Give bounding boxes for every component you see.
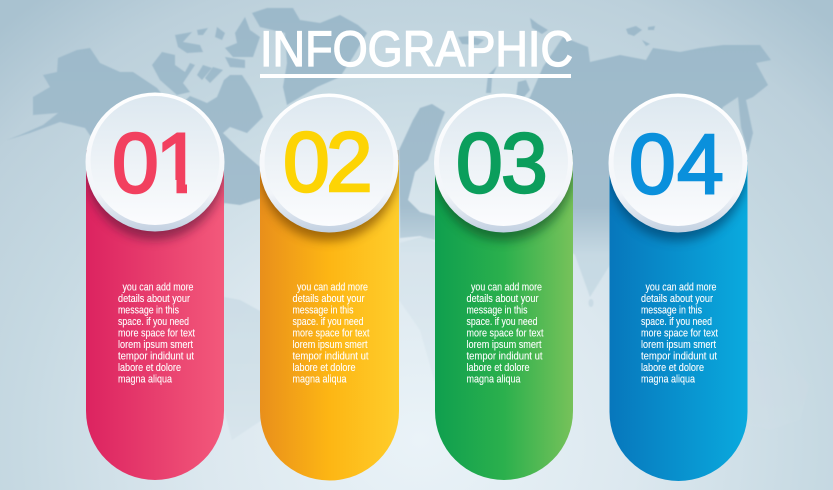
body text: [292, 282, 370, 386]
number: 2: [326, 115, 373, 209]
pill: [260, 160, 399, 480]
circle badge: [86, 92, 224, 232]
body text: details about your: [292, 293, 365, 305]
title text: INFOGRAPHIC: [260, 21, 573, 77]
number: 3: [501, 116, 548, 210]
body text: you can add more: [122, 282, 194, 294]
panel: 04: [608, 94, 748, 481]
body text: [118, 282, 195, 386]
map: Africa: [399, 236, 500, 400]
body text: lorem ipsum smert: [641, 339, 716, 351]
circle badge: [434, 94, 573, 232]
body text: lorem ipsum smert: [292, 339, 368, 351]
pill: [610, 160, 748, 481]
body text: space. if you need: [641, 316, 712, 328]
pill: [435, 160, 573, 480]
body text: space. if you need: [118, 316, 189, 328]
map: Australia: [748, 340, 810, 430]
body text: message in this: [641, 304, 702, 316]
body text: tempor indidunt ut: [292, 350, 368, 362]
body text: details about your: [466, 293, 539, 305]
map: Eurasia: [500, 37, 771, 297]
body text: details about your: [641, 293, 713, 305]
body text: message in this: [292, 304, 354, 316]
circle shadow: [86, 150, 224, 246]
panel: 03: [434, 94, 573, 480]
title underline: [260, 74, 571, 78]
map: north Atlantic islands: [458, 18, 655, 97]
panel: 01: [86, 92, 224, 480]
number: 0: [456, 116, 503, 210]
panel: 02: [260, 94, 399, 480]
number: 0: [629, 117, 676, 211]
body text: you can add more: [646, 282, 716, 294]
body text: details about your: [118, 293, 190, 305]
body text: magna aliqua: [292, 374, 347, 386]
body text: labore et dolore: [641, 362, 704, 374]
circle shadow: [435, 150, 573, 246]
title: [260, 21, 573, 78]
body text: lorem ipsum smert: [118, 339, 193, 351]
body text: labore et dolore: [292, 362, 356, 374]
number: 1: [156, 116, 202, 210]
body text: [641, 282, 718, 386]
map: Sri Lanka: [588, 299, 594, 307]
circle badge: [260, 94, 398, 232]
body text: more space for text: [466, 328, 544, 340]
circle shadow: [260, 150, 399, 247]
body text: you can add more: [471, 282, 542, 294]
map: Greenland: [252, 8, 367, 105]
body text: labore et dolore: [466, 362, 530, 374]
map: North America: [7, 48, 263, 205]
map: South America: [224, 297, 262, 440]
map: Arctic islands: [152, 17, 260, 95]
body text: magna aliqua: [641, 374, 696, 386]
body text: lorem ipsum smert: [466, 339, 542, 351]
body text: space. if you need: [466, 316, 538, 328]
pill: [86, 160, 224, 480]
body text: tempor indidunt ut: [466, 350, 542, 362]
circle badge: [608, 94, 748, 232]
body text: message in this: [118, 304, 179, 316]
number: 0: [283, 115, 330, 209]
body text: magna aliqua: [118, 374, 173, 386]
number: 0: [112, 116, 159, 210]
body text: more space for text: [292, 328, 370, 340]
body text: message in this: [466, 304, 528, 316]
number: 4: [677, 117, 724, 211]
map: Scandinavia and Europe: [399, 104, 445, 240]
body text: you can add more: [297, 282, 368, 294]
body text: more space for text: [118, 328, 195, 340]
body text: magna aliqua: [466, 374, 521, 386]
body text: space. if you need: [292, 316, 364, 328]
body text: labore et dolore: [118, 362, 181, 374]
number: [114, 132, 187, 194]
body text: [466, 282, 544, 386]
circle shadow: [610, 150, 747, 246]
body text: tempor indidunt ut: [118, 350, 194, 362]
body text: tempor indidunt ut: [641, 350, 717, 362]
body text: more space for text: [641, 328, 718, 340]
